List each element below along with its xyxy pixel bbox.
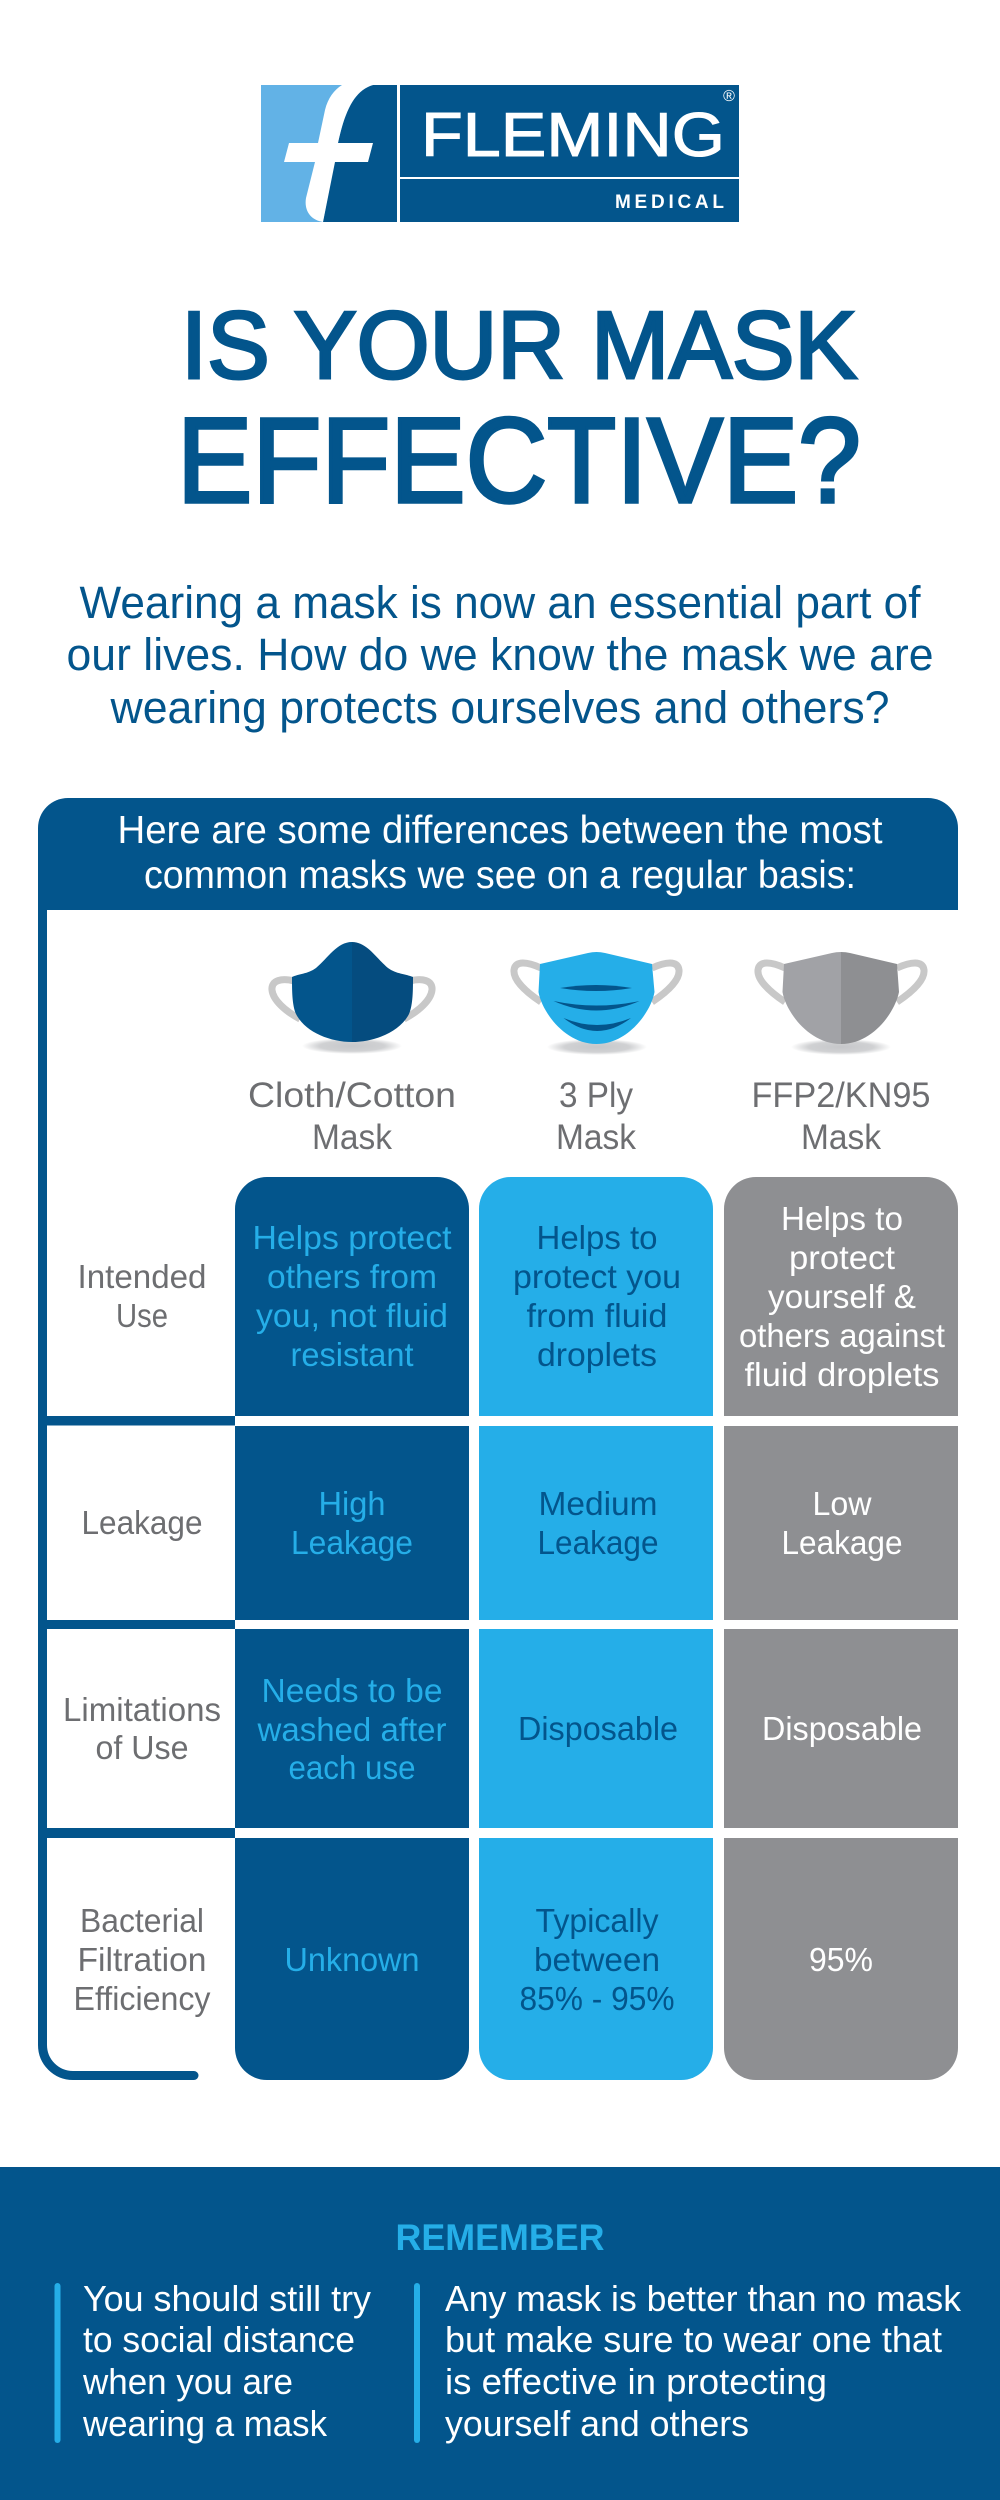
column: 3 ply mask: protect you <box>513 1258 681 1295</box>
column: cloth cotton mask: Needs to be <box>262 1672 442 1709</box>
intro text: our lives. How do we know the mask we are <box>66 629 934 680</box>
column: cloth cotton mask: each use <box>288 1749 416 1786</box>
column: FFP2/KN95 mask: fluid droplets <box>744 1356 940 1393</box>
column: 3 ply mask: from fluid <box>526 1297 668 1334</box>
mask labels <box>248 1076 930 1157</box>
row labels: Leakage <box>82 1504 202 1541</box>
reminder: any mask: but make sure to wear one that <box>445 2319 942 2360</box>
column: cloth cotton mask: Leakage <box>291 1524 413 1561</box>
row labels: Bacterial <box>80 1902 204 1939</box>
column: 3 ply mask: Medium <box>538 1485 658 1522</box>
row labels <box>63 1258 221 2017</box>
column: cloth cotton mask: washed after <box>256 1711 447 1748</box>
column: FFP2/KN95 mask: Leakage <box>782 1524 902 1561</box>
column: FFP2/KN95 mask: protect <box>789 1239 895 1276</box>
column: FFP2/KN95 mask: others against <box>739 1317 945 1354</box>
column: FFP2/KN95 mask: Helps to <box>781 1200 903 1237</box>
reminder: social distance: wearing a mask <box>82 2403 328 2444</box>
row labels: Limitations <box>63 1691 221 1728</box>
intro text: wearing protects ourselves and others? <box>110 682 890 733</box>
row labels: Efficiency <box>74 1980 211 2017</box>
mask labels: Cloth/Cotton <box>248 1076 456 1115</box>
column: cloth cotton mask: Unknown <box>284 1941 420 1978</box>
title <box>177 292 861 528</box>
panel header: Here are some differences between the most <box>118 809 883 852</box>
mask labels: 3 Ply <box>559 1076 633 1115</box>
row divider lines <box>47 1416 235 1838</box>
row labels: Filtration <box>78 1941 206 1978</box>
reminder: social distance <box>54 2278 371 2444</box>
column: cloth cotton mask: you, not fluid <box>256 1297 448 1334</box>
icon: FFP2/KN95 mask <box>758 952 924 1055</box>
column: 3 ply mask: Leakage <box>538 1524 658 1561</box>
column: 3 ply mask: between <box>534 1941 660 1978</box>
column: cloth cotton mask <box>235 1177 469 2080</box>
column: cloth cotton mask: High <box>318 1485 386 1522</box>
icon: cloth mask <box>272 942 432 1054</box>
mask labels: FFP2/KN95 <box>752 1076 930 1115</box>
column: FFP2/KN95 mask: yourself & <box>768 1278 916 1315</box>
column: 3 ply mask: Helps to <box>536 1219 658 1256</box>
title: IS YOUR MASK <box>181 292 857 399</box>
footer panel <box>0 2167 1000 2500</box>
reminder: any mask: is effective in protecting <box>445 2361 827 2402</box>
reminder: social distance: to social distance <box>83 2319 355 2360</box>
column: FFP2/KN95 mask <box>724 1177 958 2080</box>
column: FFP2/KN95 mask: Low <box>812 1485 872 1522</box>
reminder: social distance: You should still try <box>83 2278 371 2319</box>
column: cloth cotton mask: others from <box>267 1258 437 1295</box>
intro text: Wearing a mask is now an essential part of <box>80 577 921 628</box>
column: FFP2/KN95 mask: 95% <box>809 1941 873 1978</box>
column: 3 ply mask: 85% - 95% <box>520 1980 674 2017</box>
reminder: any mask: Any mask is better than no mask <box>445 2278 962 2319</box>
logo: Fleming Medical: FLEMING <box>421 101 725 170</box>
logo: Fleming Medical <box>261 85 739 222</box>
intro text <box>66 577 934 733</box>
row labels: Intended <box>78 1258 206 1295</box>
footer heading: REMEMBER <box>396 2217 604 2258</box>
column: 3 ply mask: droplets <box>537 1336 657 1373</box>
column: FFP2/KN95 mask: Disposable <box>762 1710 922 1747</box>
mask labels: Mask <box>801 1118 881 1157</box>
column: 3 ply mask: Typically <box>536 1902 659 1939</box>
panel header <box>38 798 958 910</box>
row labels: Use <box>116 1297 168 1334</box>
column: 3 ply mask <box>479 1177 713 2080</box>
reminder: any mask: yourself and others <box>445 2403 749 2444</box>
icon: 3 ply mask <box>514 952 679 1055</box>
logo: Fleming Medical: MEDICAL <box>615 192 724 213</box>
mask labels: Mask <box>312 1118 392 1157</box>
column: cloth cotton mask: resistant <box>290 1336 414 1373</box>
mask labels: Mask <box>556 1118 636 1157</box>
panel header: common masks we see on a regular basis: <box>144 854 856 897</box>
table frame <box>42 905 194 2076</box>
reminder: any mask <box>414 2278 962 2444</box>
title: EFFECTIVE? <box>177 392 861 528</box>
row labels: of Use <box>96 1729 188 1766</box>
reminder: social distance: when you are <box>82 2361 293 2402</box>
logo: Fleming Medical: ® <box>723 88 735 105</box>
column: 3 ply mask: Disposable <box>518 1710 678 1747</box>
column: cloth cotton mask: Helps protect <box>252 1219 452 1256</box>
